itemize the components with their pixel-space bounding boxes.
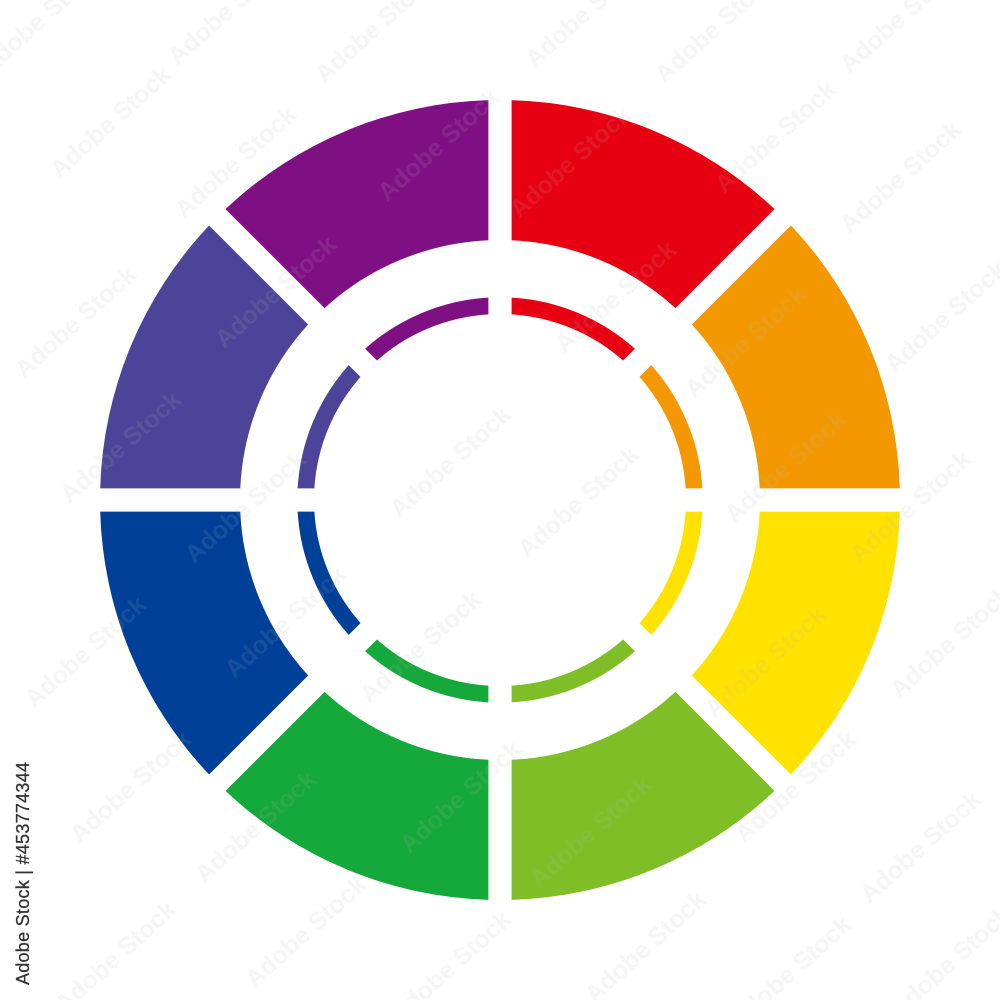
- stock watermark pattern: Adobe Stock: [855, 785, 987, 909]
- outer segment: red: [512, 100, 775, 308]
- stock watermark pattern: Adobe Stock: [180, 445, 312, 569]
- outer segment: green: [225, 692, 488, 900]
- inner ring segment: lime green: [512, 639, 635, 702]
- stock watermark pattern: Adobe Stock: [170, 100, 302, 224]
- stock watermark pattern: Adobe Stock: [210, 230, 342, 354]
- inner ring segment: yellow: [639, 512, 702, 635]
- stock watermark pattern: Adobe Stock: [240, 870, 372, 994]
- stock watermark pattern: Adobe Stock: [710, 75, 842, 199]
- inner ring segment: blue: [298, 512, 361, 635]
- outer segment: lime green: [512, 692, 775, 900]
- inner ring segment: purple: [365, 298, 488, 361]
- stock watermark pattern: Adobe Stock: [20, 590, 152, 714]
- stock watermark pattern: Adobe Stock: [220, 560, 352, 684]
- colour wheel: [100, 100, 900, 900]
- inner ring segment: orange: [639, 365, 702, 488]
- stock watermark pattern: Adobe Stock: [720, 405, 852, 529]
- stock watermark pattern: Adobe Stock: [845, 445, 977, 569]
- stock watermark pattern: Adobe Stock: [700, 600, 832, 724]
- inner ring segment: red: [512, 298, 635, 361]
- stock watermark pattern: Adobe Stock: [45, 60, 177, 184]
- stock watermark pattern: Adobe Stock: [373, 83, 505, 207]
- inner ring segment: green: [365, 639, 488, 702]
- stock watermark pattern: Adobe Stock: [190, 765, 322, 889]
- inner ring segment: indigo: [298, 365, 361, 488]
- outer segment: purple: [225, 100, 488, 308]
- stock watermark pattern: Adobe Stock: [395, 735, 527, 859]
- stock watermark pattern: Adobe Stock: [550, 235, 682, 359]
- outer segment: yellow: [692, 512, 900, 775]
- stock watermark pattern: Adobe Stock: [835, 115, 967, 239]
- outer segment: orange: [692, 225, 900, 488]
- stock watermark pattern: Adobe Stock: [65, 725, 197, 849]
- outer segment: blue: [100, 512, 308, 775]
- stock watermark pattern: Adobe Stock: [680, 280, 812, 404]
- stock watermark pattern: Adobe Stock: [355, 585, 487, 709]
- stock watermark pattern: Adobe Stock: [55, 385, 187, 509]
- stock watermark pattern: Adobe Stock: [385, 400, 517, 524]
- stock watermark pattern: Adobe Stock: [10, 260, 142, 384]
- stock watermark pattern: Adobe Stock: [513, 440, 645, 564]
- stock watermark pattern: Adobe Stock: [525, 770, 657, 894]
- stock watermark pattern: Adobe Stock: [505, 100, 637, 224]
- outer segment: indigo: [100, 225, 308, 488]
- vertical stock credit: Adobe Stock | #453774344: [13, 762, 33, 985]
- stock watermark pattern: Adobe Stock: [730, 725, 862, 849]
